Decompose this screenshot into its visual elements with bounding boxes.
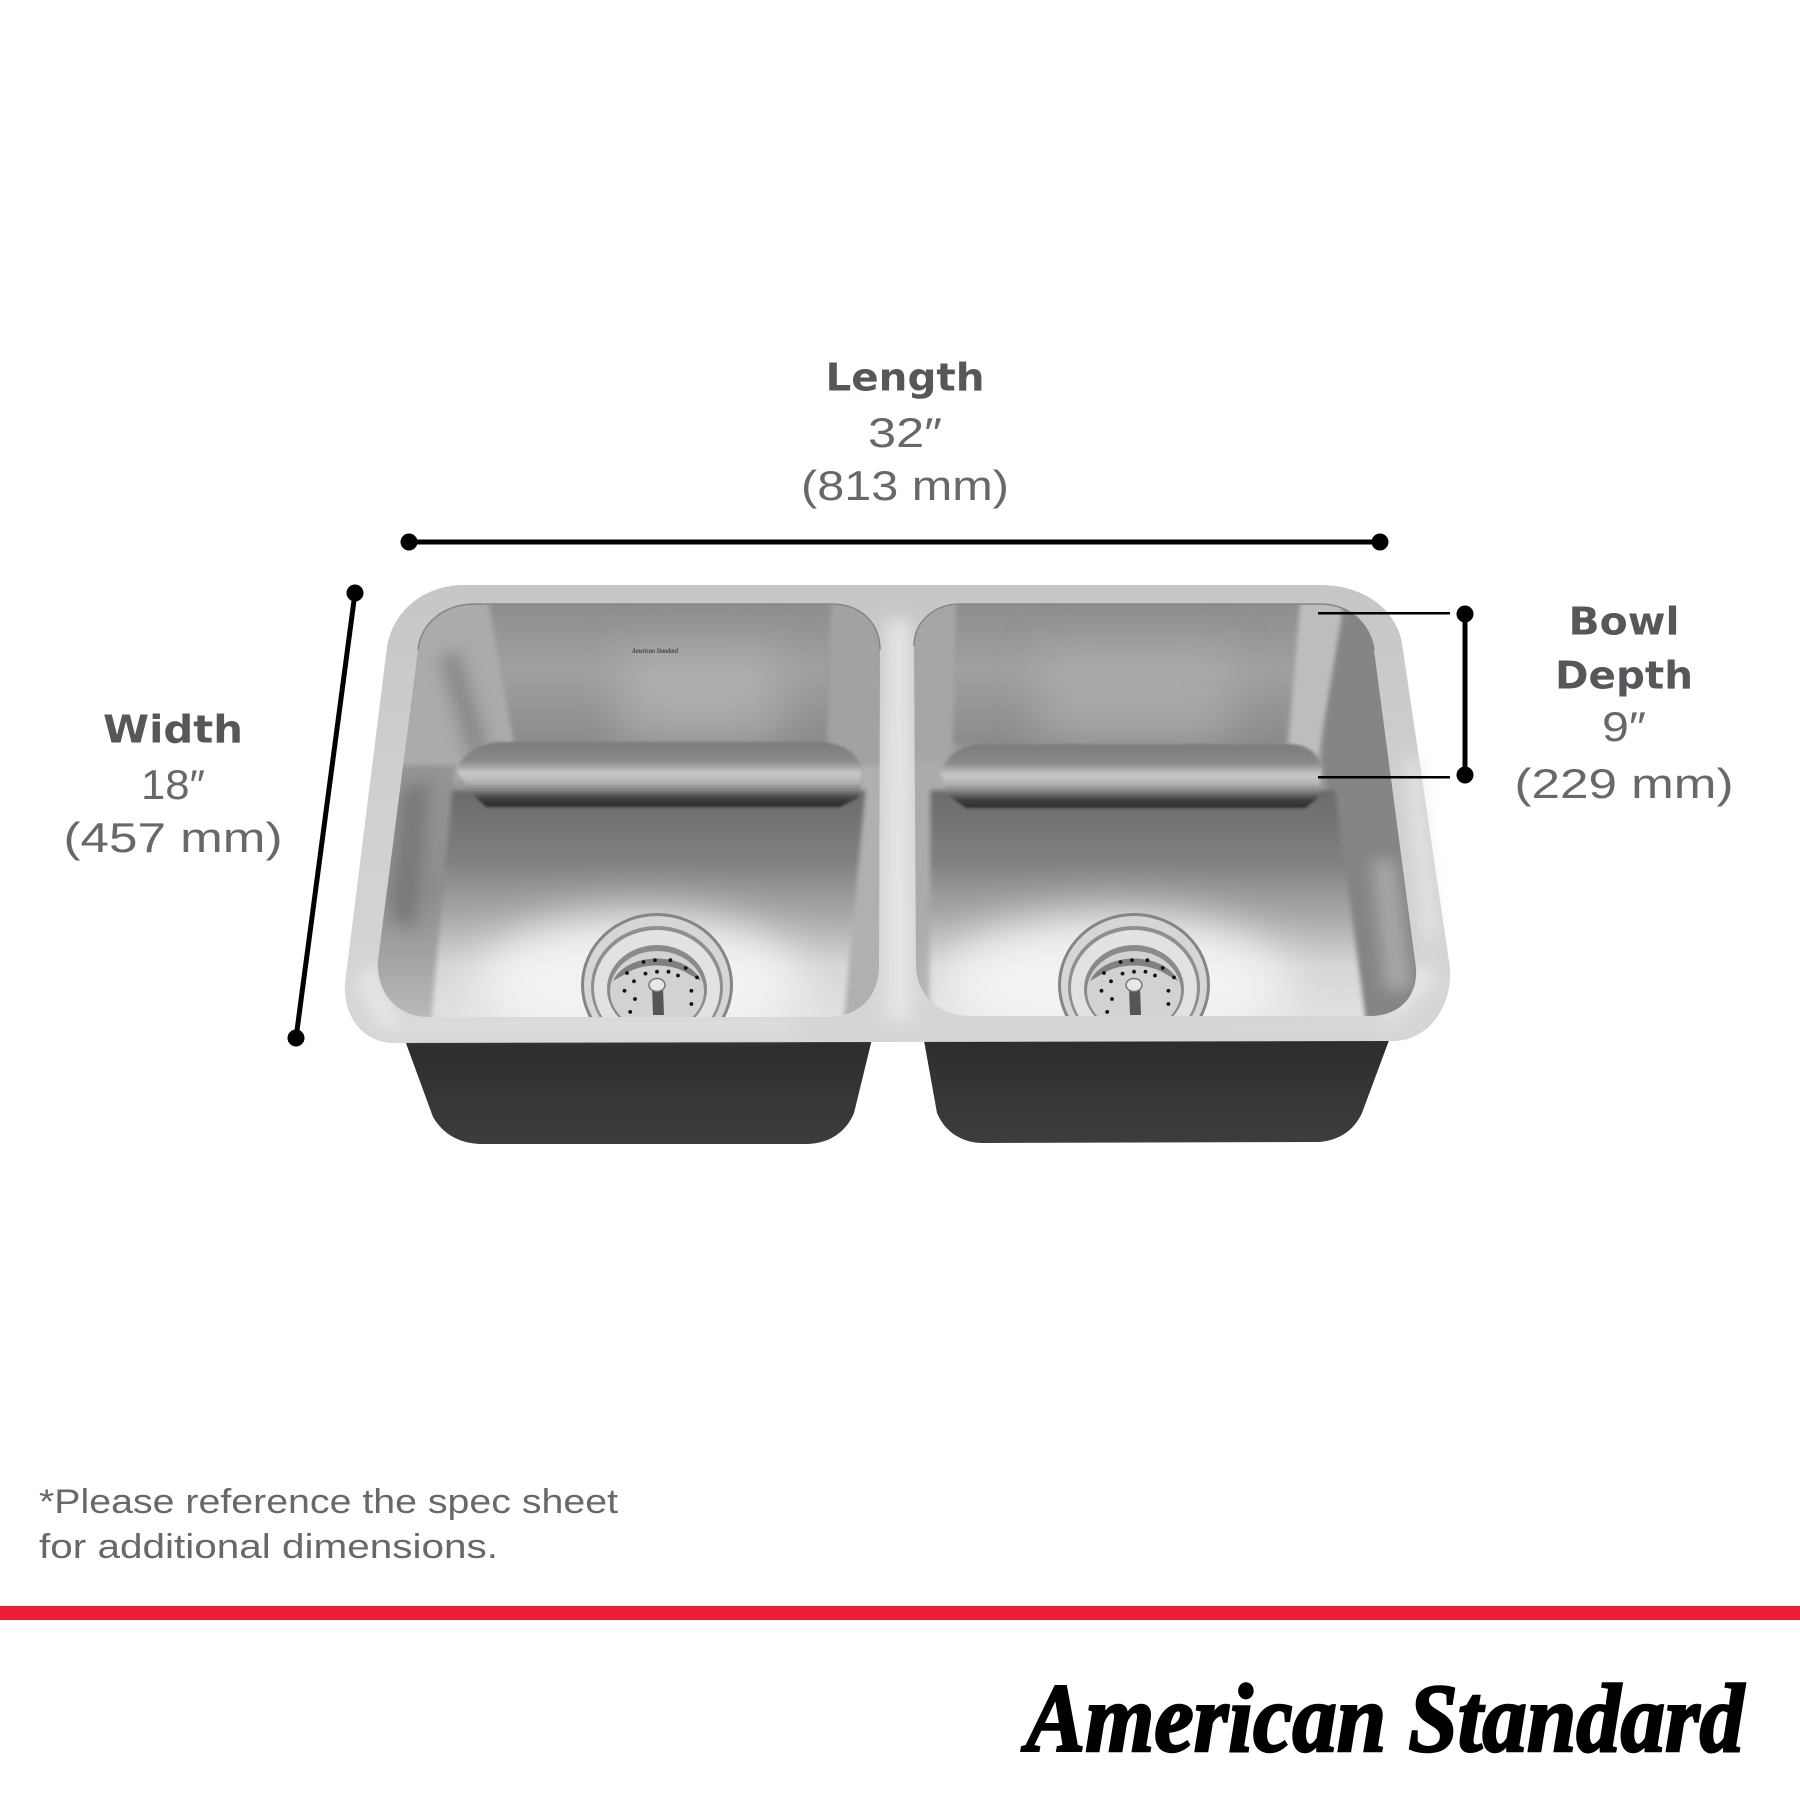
left bowl corner shading: [440, 650, 488, 765]
left bowl back wall: [487, 595, 831, 745]
length dimension line: [400, 534, 1388, 550]
right bowl back wall: [953, 595, 1301, 745]
left bowl back right corner: [827, 595, 890, 785]
width label: (457 mm): [64, 814, 282, 861]
length label: 32″: [868, 409, 942, 456]
left bowl: [378, 604, 880, 1017]
right bowl left wall: [914, 760, 946, 998]
bowl depth label: Depth: [1555, 654, 1693, 698]
left bowl ledge: [456, 742, 862, 807]
right bowl wall highlight: [1372, 860, 1412, 990]
left bowl right wall: [844, 766, 880, 1014]
dark underside of left bowl: [403, 1035, 873, 1144]
right strainer drain: [1058, 913, 1210, 1016]
engraved logo on back wall: American Standard: [631, 647, 678, 655]
right bowl rim line: [914, 604, 1374, 650]
left bowl wall streak: [392, 780, 430, 930]
length label: Length: [826, 356, 984, 400]
bowl depth label: Bowl: [1568, 600, 1680, 644]
left bowl floor glow: [475, 915, 805, 1055]
rim highlights: [355, 620, 1440, 1030]
length label: [801, 356, 1009, 509]
sink illustration: [345, 585, 1450, 1144]
American Standard logo: American Standard: [1021, 1665, 1746, 1773]
right bowl blended surfaces: [905, 595, 1425, 1025]
right bowl floor: [930, 790, 1366, 1025]
right bowl: [914, 604, 1416, 1016]
left bowl back wall sheen: [620, 650, 780, 740]
left bowl blended surfaces: [360, 595, 890, 1025]
left bowl left wall: [378, 764, 456, 1017]
bowl depth label: (229 mm): [1514, 760, 1734, 807]
right bowl back right corner: [1287, 604, 1345, 758]
bowl depth dimension bracket: [1318, 606, 1474, 784]
right bowl right wall: [1322, 610, 1416, 1016]
footnote: [39, 1483, 619, 1566]
bowl depth label: [1514, 600, 1734, 807]
footnote: for additional dimensions.: [39, 1528, 498, 1566]
right bowl floor glow: [940, 915, 1290, 1055]
right bowl back wall sheen: [1040, 650, 1230, 740]
width label: [64, 708, 282, 861]
left bowl back left corner: [404, 604, 513, 781]
width label: 18″: [141, 761, 205, 808]
red divider bar: [0, 1606, 1800, 1620]
dark underside of right bowl: [923, 1035, 1391, 1143]
right bowl back left corner: [914, 605, 955, 758]
left strainer drain: [581, 913, 733, 1017]
bowl depth label: 9″: [1602, 703, 1646, 750]
width label: Width: [103, 708, 243, 752]
left bowl rim line: [418, 604, 880, 650]
width dimension line: [288, 584, 364, 1046]
footnote: *Please reference the spec sheet: [39, 1483, 619, 1521]
left bowl floor: [431, 790, 866, 1025]
length label: (813 mm): [801, 462, 1009, 509]
stainless steel rim: [345, 585, 1450, 1043]
right bowl ledge: [940, 744, 1322, 808]
